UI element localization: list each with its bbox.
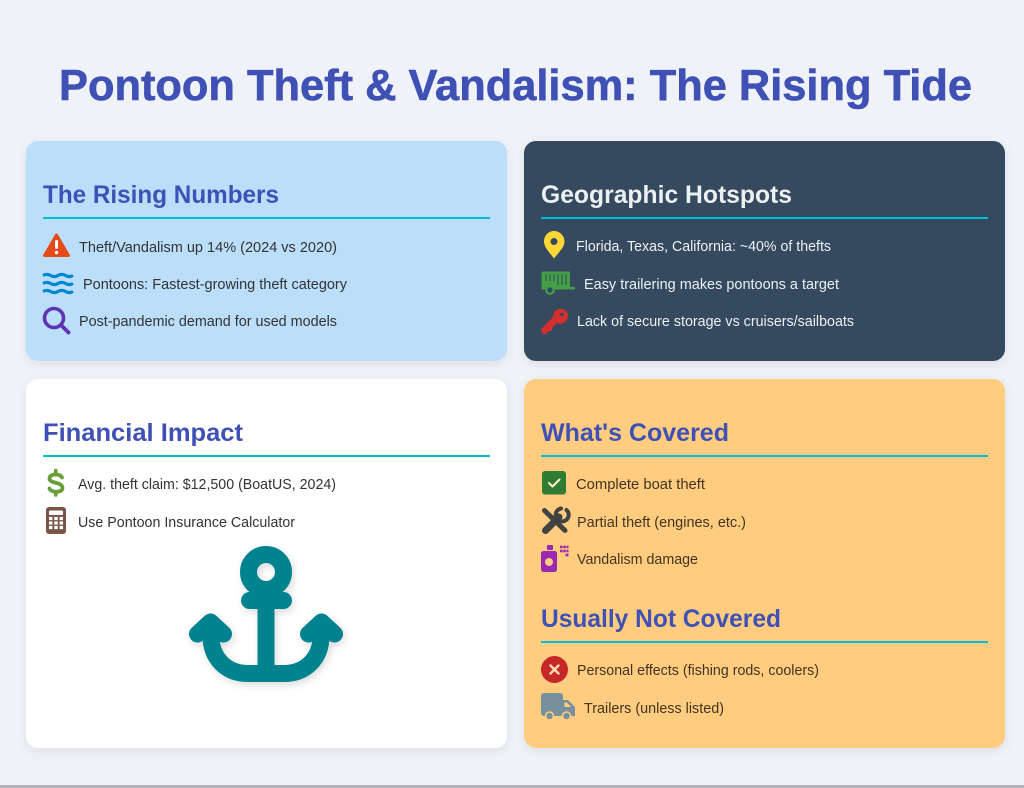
text: pontoons fastest-growing: Pontoons: Fastest-growing theft category — [83, 277, 348, 293]
icon: x circle — [541, 656, 568, 683]
text: partial theft: Partial theft (engines, etc.) — [577, 515, 746, 531]
text: vandalism damage: Vandalism damage — [577, 552, 698, 568]
heading: financial impact: Financial Impact — [43, 419, 244, 447]
heading: the rising numbers: The Rising Numbers — [43, 181, 279, 209]
heading: geographic hotspots: Geographic Hotspots — [541, 181, 792, 209]
text: lack of secure storage: Lack of secure storage vs cruisers/sailboats — [577, 314, 854, 330]
text: complete boat theft: Complete boat theft — [576, 477, 705, 493]
icon: truck — [541, 693, 575, 720]
text: easy trailering: Easy trailering makes pontoons a target — [584, 277, 839, 293]
text: personal effects: Personal effects (fishing rods, coolers) — [577, 663, 819, 679]
icon: key — [542, 309, 568, 334]
panel: financial impact — [26, 379, 507, 748]
icon: dollar sign — [50, 470, 62, 495]
heading: what's covered: What's Covered — [541, 419, 729, 447]
text: post-pandemic demand: Post-pandemic demand for used models — [79, 314, 337, 330]
panel: geographic hotspots — [524, 141, 1005, 361]
panel: the rising numbers — [26, 141, 507, 361]
icon: tools — [544, 508, 569, 530]
text: average theft claim: Avg. theft claim: $12,500 (BoatUS, 2024) — [78, 477, 336, 493]
title: Pontoon Theft & Vandalism: The Rising Tide — [59, 61, 972, 110]
text: theft up: Theft/Vandalism up 14% (2024 vs 2020) — [79, 240, 337, 256]
text: trailers: Trailers (unless listed) — [584, 701, 724, 717]
text: use calculator: Use Pontoon Insurance Calculator — [78, 515, 295, 531]
text: florida texas california: Florida, Texas, California: ~40% of thefts — [576, 239, 831, 255]
icon: map pin — [544, 231, 564, 258]
icon: check box — [542, 471, 566, 494]
icon: trailer — [542, 272, 575, 294]
icon: magnifier — [44, 308, 68, 332]
icon: spray can — [541, 545, 568, 572]
icon: warning triangle — [44, 235, 68, 256]
icon: anchor — [198, 554, 334, 674]
heading: usually not covered: Usually Not Covered — [541, 605, 781, 633]
icon: waves — [43, 274, 73, 293]
icon: calculator — [46, 507, 66, 534]
panel: coverage — [524, 379, 1005, 748]
